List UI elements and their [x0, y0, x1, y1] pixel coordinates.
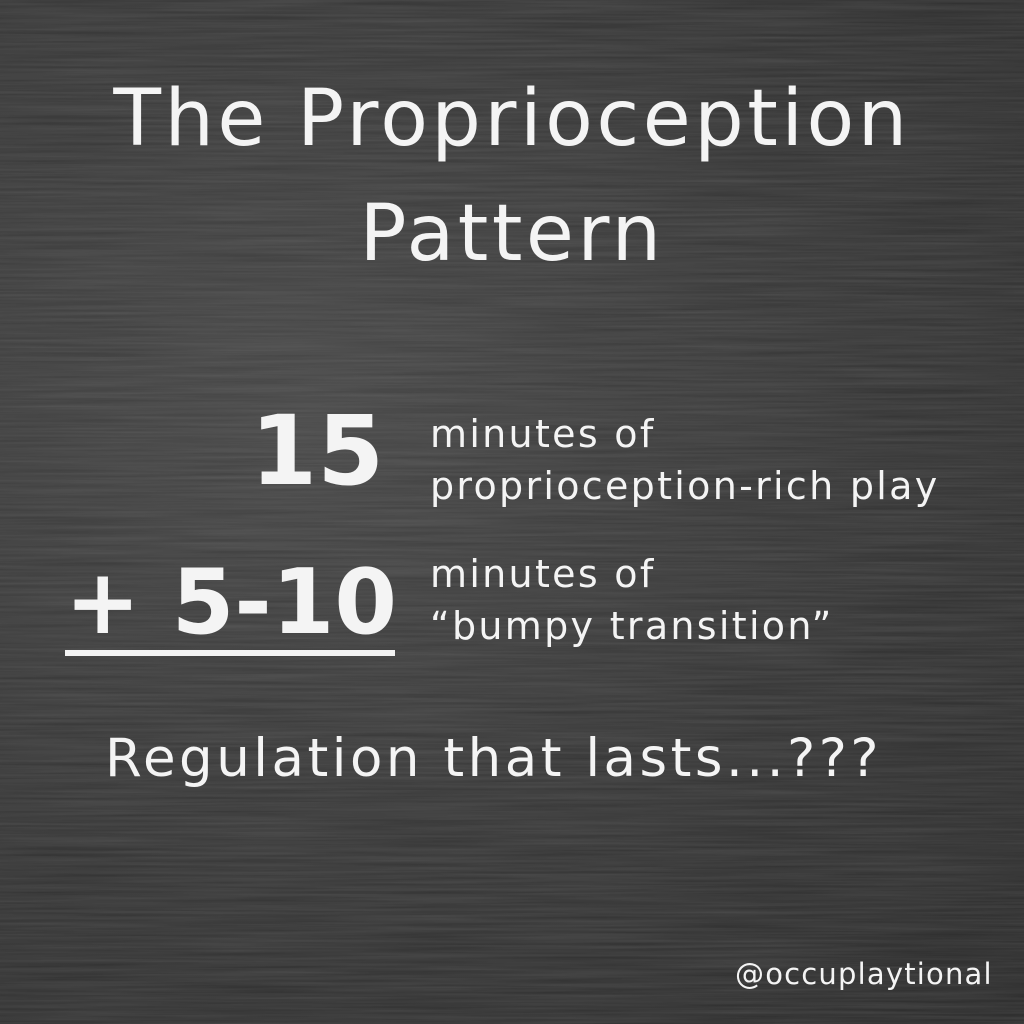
title [113, 74, 911, 279]
title: Pattern [359, 189, 665, 279]
text: proprioception-rich play: minutes of [430, 412, 656, 456]
text: bumpy transition: minutes of [430, 552, 656, 596]
text: proprioception-rich play: proprioception-rich play [430, 464, 940, 508]
number 15: 15 [250, 395, 384, 507]
text: proprioception-rich play [430, 412, 940, 508]
conclusion: Regulation that lasts...??? [105, 728, 882, 789]
handle: @occuplaytional [735, 957, 993, 991]
title: The Proprioception [113, 74, 911, 164]
text: bumpy transition: “bumpy transition” [430, 604, 834, 648]
number 5-10 with underline: + 5-10 [65, 550, 397, 655]
text: bumpy transition [430, 552, 834, 648]
